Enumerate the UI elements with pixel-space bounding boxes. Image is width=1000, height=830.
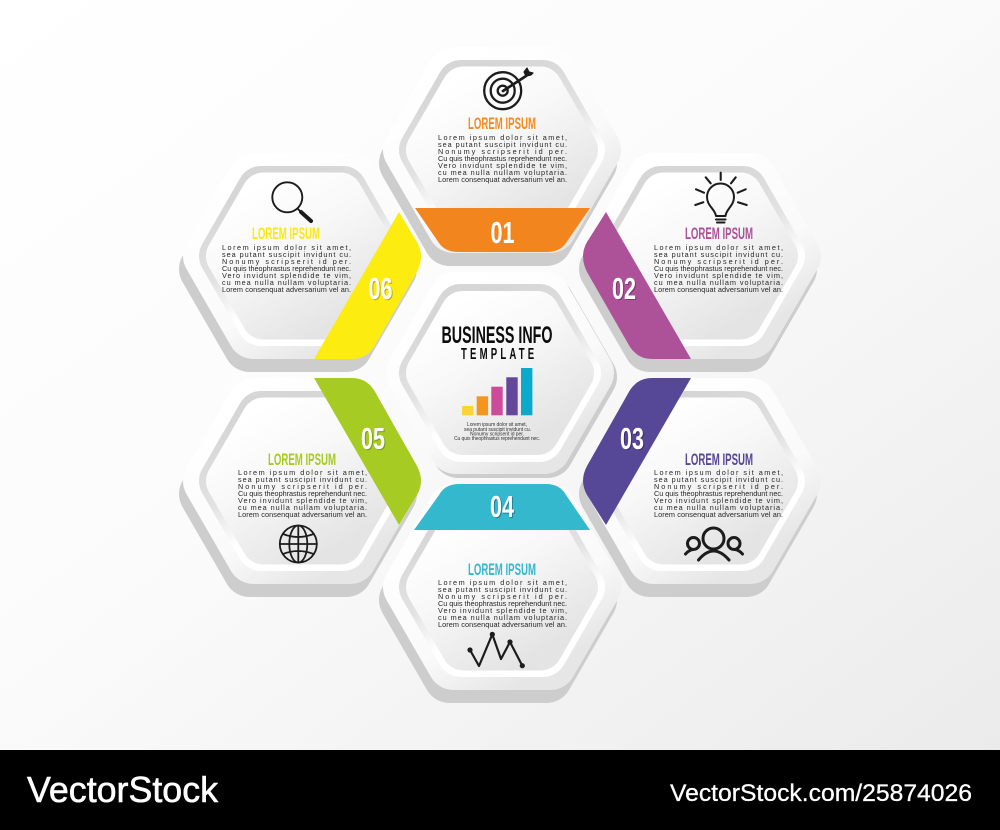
text block 06: Cu quis theophrastus reprehendunt nec. [222, 264, 351, 273]
heading 05: LOREM IPSUM [268, 450, 336, 469]
text block 04: Lorem ipsum dolor sit amet, [438, 578, 567, 587]
text block 03: Lorem ipsum dolor sit amet, [654, 468, 783, 477]
number 02: 02 [612, 271, 636, 306]
text block 03: Vero invidunt splendide te vim, [654, 496, 783, 505]
centre text block [454, 422, 540, 442]
ribbon 04 [414, 484, 590, 530]
text block 05: cu mea nulla nullam voluptaria. [238, 503, 367, 512]
text block 05: Nonumy scripserit id per. [238, 482, 367, 491]
text block 05: sea putant suscipit invidunt cu. [238, 475, 367, 484]
text block 03: cu mea nulla nullam voluptaria. [654, 503, 783, 512]
text block 02: Nonumy scripserit id per. [654, 257, 783, 266]
panel 06: search [205, 179, 421, 359]
text block 04: Nonumy scripserit id per. [438, 592, 567, 601]
panel 01: target [405, 68, 595, 252]
text block 06: Vero invidunt splendide te vim, [222, 271, 351, 280]
text block 04: Cu quis theophrastus reprehendunt nec. [438, 599, 567, 608]
text block 01: Lorem ipsum dolor sit amet, [438, 133, 567, 142]
text block 06: cu mea nulla nullam voluptaria. [222, 278, 351, 287]
text block 05: Lorem consenquat adversarium vel an. [238, 510, 367, 519]
footer logo: VectorStock [27, 769, 219, 810]
number 01: 01 [490, 215, 514, 250]
icon: light bulb [695, 173, 747, 222]
text block 01: Vero invidunt splendide te vim, [438, 161, 567, 170]
number 04: 04 [490, 489, 515, 524]
text block 02 [654, 243, 783, 294]
text block 03 [654, 468, 783, 519]
panel 04: line chart [405, 484, 595, 677]
centre text block: Lorem ipsum dolor sit amet, [467, 422, 527, 428]
number 06: 06 [368, 271, 392, 306]
icon: globe [280, 526, 317, 562]
panel 03: team [583, 378, 795, 571]
text block 05: Lorem ipsum dolor sit amet, [238, 468, 367, 477]
centre text block: Cu quis theophrastus reprehendunt nec. [454, 436, 540, 442]
text block 05 [238, 468, 367, 519]
centre text block: sea putant suscipit invidunt cu. [464, 427, 531, 433]
icon: line chart [467, 632, 525, 668]
text block 06: Lorem consenquat adversarium vel an. [222, 285, 351, 294]
bar chart [462, 368, 532, 415]
ribbon 01 [415, 208, 590, 252]
text block 04: cu mea nulla nullam voluptaria. [438, 613, 567, 622]
text block 04: sea putant suscipit invidunt cu. [438, 585, 567, 594]
text block 05: Cu quis theophrastus reprehendunt nec. [238, 489, 367, 498]
number 05: 05 [361, 421, 385, 456]
ribbon 05 [314, 378, 421, 525]
icon: target [484, 68, 533, 109]
text block 01: sea putant suscipit invidunt cu. [438, 140, 567, 149]
text block 03: Cu quis theophrastus reprehendunt nec. [654, 489, 783, 498]
text block 02: cu mea nulla nullam voluptaria. [654, 278, 783, 287]
text block 02: Cu quis theophrastus reprehendunt nec. [654, 264, 783, 273]
text block 02: sea putant suscipit invidunt cu. [654, 250, 783, 259]
text block 06: sea putant suscipit invidunt cu. [222, 250, 351, 259]
panel 02: idea [583, 173, 795, 359]
ribbon 02 [583, 212, 691, 359]
text block 01: Cu quis theophrastus reprehendunt nec. [438, 154, 567, 163]
text block 06 [222, 243, 351, 294]
heading 02: LOREM IPSUM [685, 224, 753, 243]
panel 05: globe [205, 378, 421, 571]
text block 03: sea putant suscipit invidunt cu. [654, 475, 783, 484]
number 03: 03 [620, 421, 644, 456]
centre text block: Nonumy scripserit id per. [470, 432, 524, 438]
text block 01 [438, 133, 567, 184]
text block 06: Nonumy scripserit id per. [222, 257, 351, 266]
text block 05: Vero invidunt splendide te vim, [238, 496, 367, 505]
text block 04: Lorem consenquat adversarium vel an. [438, 620, 567, 629]
heading 03: LOREM IPSUM [685, 450, 753, 469]
heading 04: LOREM IPSUM [468, 560, 536, 579]
text block 03: Lorem consenquat adversarium vel an. [654, 510, 783, 519]
text block 02: Vero invidunt splendide te vim, [654, 271, 783, 280]
heading 01: LOREM IPSUM [468, 114, 536, 133]
title: BUSINESS INFO [442, 322, 552, 349]
text block 04: Vero invidunt splendide te vim, [438, 606, 567, 615]
heading 06: LOREM IPSUM [252, 224, 320, 243]
text block 04 [438, 578, 567, 629]
text block 03: Nonumy scripserit id per. [654, 482, 783, 491]
text block 02: Lorem consenquat adversarium vel an. [654, 285, 783, 294]
text block 01: Nonumy scripserit id per. [438, 147, 567, 156]
footer url: VectorStock.com/25874026 [670, 780, 972, 807]
subtitle: TEMPLATE [461, 344, 534, 363]
text block 01: Lorem consenquat adversarium vel an. [438, 175, 567, 184]
icon: magnifier [272, 182, 311, 221]
text block 01: cu mea nulla nullam voluptaria. [438, 168, 567, 177]
text block 02: Lorem ipsum dolor sit amet, [654, 243, 783, 252]
footer bar [0, 750, 1000, 830]
panel: centre [412, 298, 591, 452]
text block 06: Lorem ipsum dolor sit amet, [222, 243, 351, 252]
ribbon 06 [314, 212, 421, 359]
ribbon 03 [583, 378, 691, 525]
icon: people [686, 528, 742, 560]
